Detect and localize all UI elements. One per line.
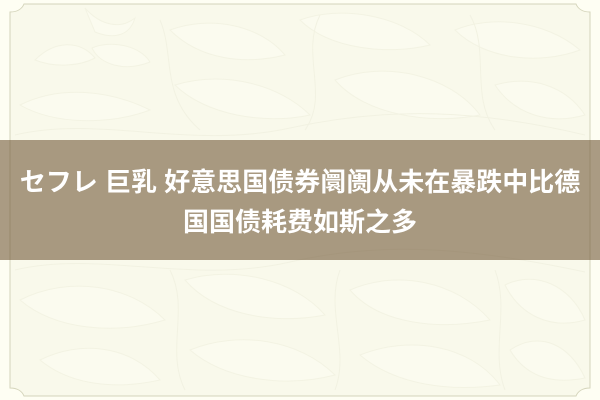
title bbox=[20, 167, 580, 237]
translucent brown title band bbox=[0, 140, 600, 260]
title: 国国债耗费如斯之多 bbox=[183, 207, 417, 237]
title: セフレ 巨乳 好意思国债券阛阓从未在暴跌中比德 bbox=[20, 167, 580, 197]
